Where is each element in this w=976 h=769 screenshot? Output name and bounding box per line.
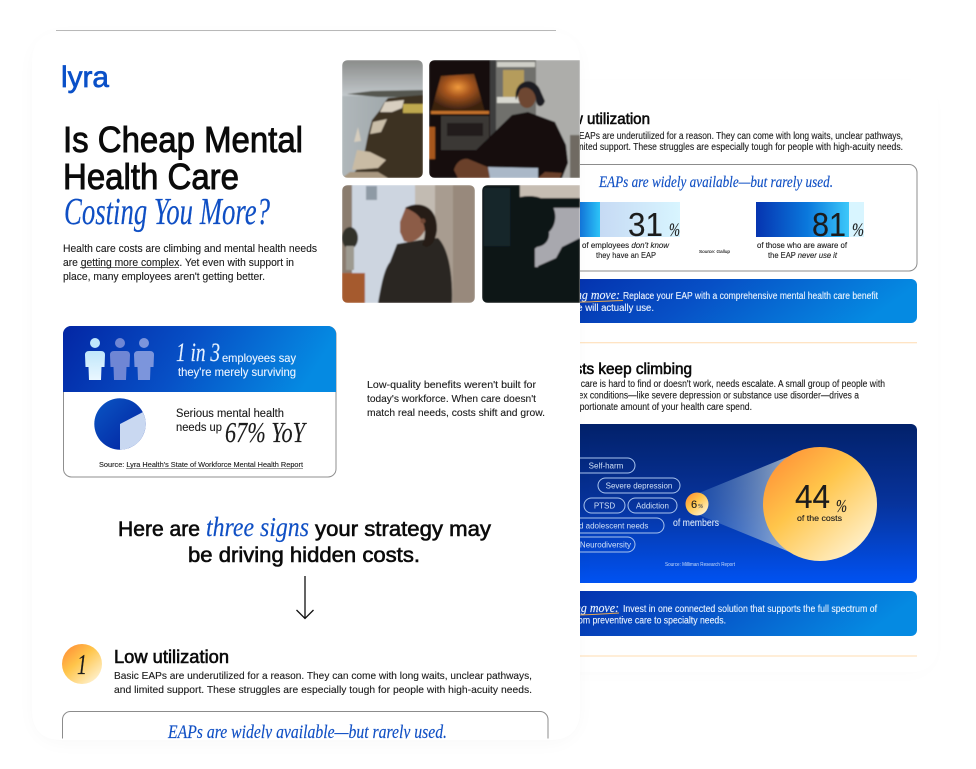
photo: silhouette by window — [482, 185, 580, 303]
photo: man meditating in kitchen — [429, 60, 580, 178]
panel: EAP statistics (clipped): EAPs are widely available—but rarely used. — [167, 722, 447, 743]
title: Is Cheap Mental — [63, 119, 303, 160]
pie chart: 67 percent — [94, 398, 146, 450]
number badge: 1 — [62, 644, 102, 684]
heading: low utilization: Low utilization — [114, 647, 229, 667]
back page: right-hand sheet — [470, 80, 938, 675]
condition pills — [530, 458, 680, 552]
caption: 81 percent — [757, 240, 848, 260]
heading: three signs — [118, 512, 492, 567]
number badge: 1: 1 — [77, 649, 87, 681]
section 2 body text: complex conditions—like severe depression or substance use disorder—drives a — [556, 390, 859, 402]
small circle: 6 percent: % — [698, 504, 703, 510]
title: Health Care — [63, 156, 239, 197]
panel: EAP statistics — [514, 164, 917, 271]
large circle: 44 percent — [763, 447, 877, 561]
title — [63, 119, 303, 233]
cone connecting 6 percent to 44 percent — [699, 455, 792, 553]
large circle: 44 percent: % — [836, 496, 847, 516]
caption: 31 percent: they have an EAP — [596, 250, 656, 260]
intro text — [63, 243, 317, 283]
panel title: EAPs are widely available—but rarely used. — [598, 174, 833, 191]
stat: serious mental health: 67% YoY — [225, 418, 308, 449]
caption: 81 percent: of those who are aware of — [757, 240, 848, 250]
icon: three people — [85, 338, 154, 380]
stat: 1 in 3: employees say — [222, 351, 296, 365]
side note text: today's workforce. When care doesn't — [367, 393, 536, 405]
section 2 body text — [556, 379, 885, 413]
blue banner — [63, 326, 336, 392]
arrow: down — [296, 576, 314, 618]
condition pills: Neurodiversity — [580, 540, 631, 550]
small circle: 6 percent: 6 — [691, 499, 697, 511]
side note text: match real needs, costs shift and grow. — [367, 407, 545, 419]
section 2 heading: costs keep climbing: Costs keep climbing — [555, 361, 692, 378]
callout: winning move 1: Winning move: — [548, 287, 620, 302]
main page card shadow — [32, 36, 580, 744]
body: low utilization — [114, 670, 532, 696]
photo: coastal cliffs — [342, 60, 423, 178]
condition pills: PTSD — [594, 502, 615, 510]
callout: winning move 1: Replace your EAP with a comprehensive mental health care benefit — [623, 291, 878, 302]
stat: serious mental health: Serious mental health — [176, 408, 284, 420]
label: of members: of members — [673, 518, 719, 529]
intro text: Health care costs are climbing and mental health needs — [63, 243, 317, 255]
stat: serious mental health: needs up — [176, 422, 222, 434]
source: Lyra Health: Source: Lyra Health's State of Workforce Mental Health Report — [99, 460, 304, 469]
stat: serious mental health — [176, 408, 308, 449]
condition pills: Addiction — [636, 502, 669, 510]
stat bar: 31 percent — [573, 202, 680, 243]
panel: workforce statistics — [63, 326, 336, 477]
main page card — [62, 60, 580, 738]
heading: three signs: your strategy may — [315, 518, 492, 541]
callout: winning move 2: Winning move: — [547, 600, 619, 615]
callout: winning move 2: Invest in one connected solution that supports the full spectrum of — [623, 604, 877, 615]
intro text: place, many employees aren't getting better. — [63, 271, 265, 283]
stat bar: 31 percent: 31 — [628, 206, 663, 243]
section 1 body text: Basic EAPs are underutilized for a reason. They can come with long waits, unclear pathways, — [556, 131, 903, 142]
body: low utilization: Basic EAPs are underutilized for a reason. They can come with long waits, unclear pathways, — [114, 670, 532, 682]
small circle: 6 percent — [686, 492, 708, 516]
side note text — [367, 379, 545, 419]
side note text: Low-quality benefits weren't built for — [367, 379, 537, 391]
condition pills: Severe depression — [606, 482, 672, 490]
stat: 1 in 3: they're merely surviving — [178, 365, 296, 379]
source: Milliman: Source: Milliman Research Report — [665, 562, 736, 568]
stat bar: 81 percent — [756, 202, 864, 243]
section 2 body text: When care is hard to find or doesn't work, needs escalate. A small group of people with — [556, 379, 885, 390]
stat bar: 81 percent: % — [852, 220, 864, 241]
callout: winning move 1: people will actually use. — [554, 303, 654, 314]
condition pills: Self-harm — [589, 462, 624, 470]
panel: cost concentration chart — [514, 424, 917, 583]
panel: EAP statistics (clipped) — [62, 711, 548, 738]
title: Costing You More? — [64, 191, 270, 233]
top rule of back page — [56, 30, 556, 32]
section 2 body text: disproportionate amount of your health care spend. — [556, 402, 752, 413]
body: low utilization: and limited support. These struggles are especially tough for people with high-acuity needs. — [114, 684, 532, 696]
intro text: are getting more complex. Yet even with support in — [63, 257, 294, 269]
caption: 31 percent — [582, 240, 670, 260]
condition pills: Child and adolescent needs — [550, 522, 648, 530]
heading: three signs: Here are — [118, 518, 200, 541]
section 1 heading: low utilization: Low utilization — [555, 111, 650, 128]
callout: winning move 2 — [514, 591, 917, 636]
caption: 31 percent: of employees don't know — [582, 240, 670, 250]
stat bar: 81 percent: 81 — [812, 206, 846, 243]
caption: 81 percent: the EAP never use it — [768, 250, 838, 260]
heading: three signs: three signs — [206, 512, 309, 542]
callout: winning move 2: care, from preventive care to specialty needs. — [551, 616, 726, 626]
logo: lyra: lyra — [61, 61, 109, 94]
photo: woman leaning on wall — [342, 185, 475, 303]
stat: 1 in 3: 1 in 3 — [176, 338, 220, 367]
callout: winning move 1 — [514, 279, 917, 323]
section 1 body text: and limited support. These struggles are especially tough for people with high-acuity needs. — [556, 142, 903, 153]
stat: 1 in 3 — [176, 343, 296, 378]
large circle: 44 percent: 44 — [795, 478, 830, 515]
stat bar: 31 percent: % — [669, 220, 680, 241]
heading: three signs: be driving hidden costs. — [188, 544, 420, 567]
large circle: 44 percent: of the costs — [797, 513, 842, 523]
source: Gallup: Source: Gallup — [699, 249, 731, 254]
section 1 body text — [556, 131, 903, 153]
